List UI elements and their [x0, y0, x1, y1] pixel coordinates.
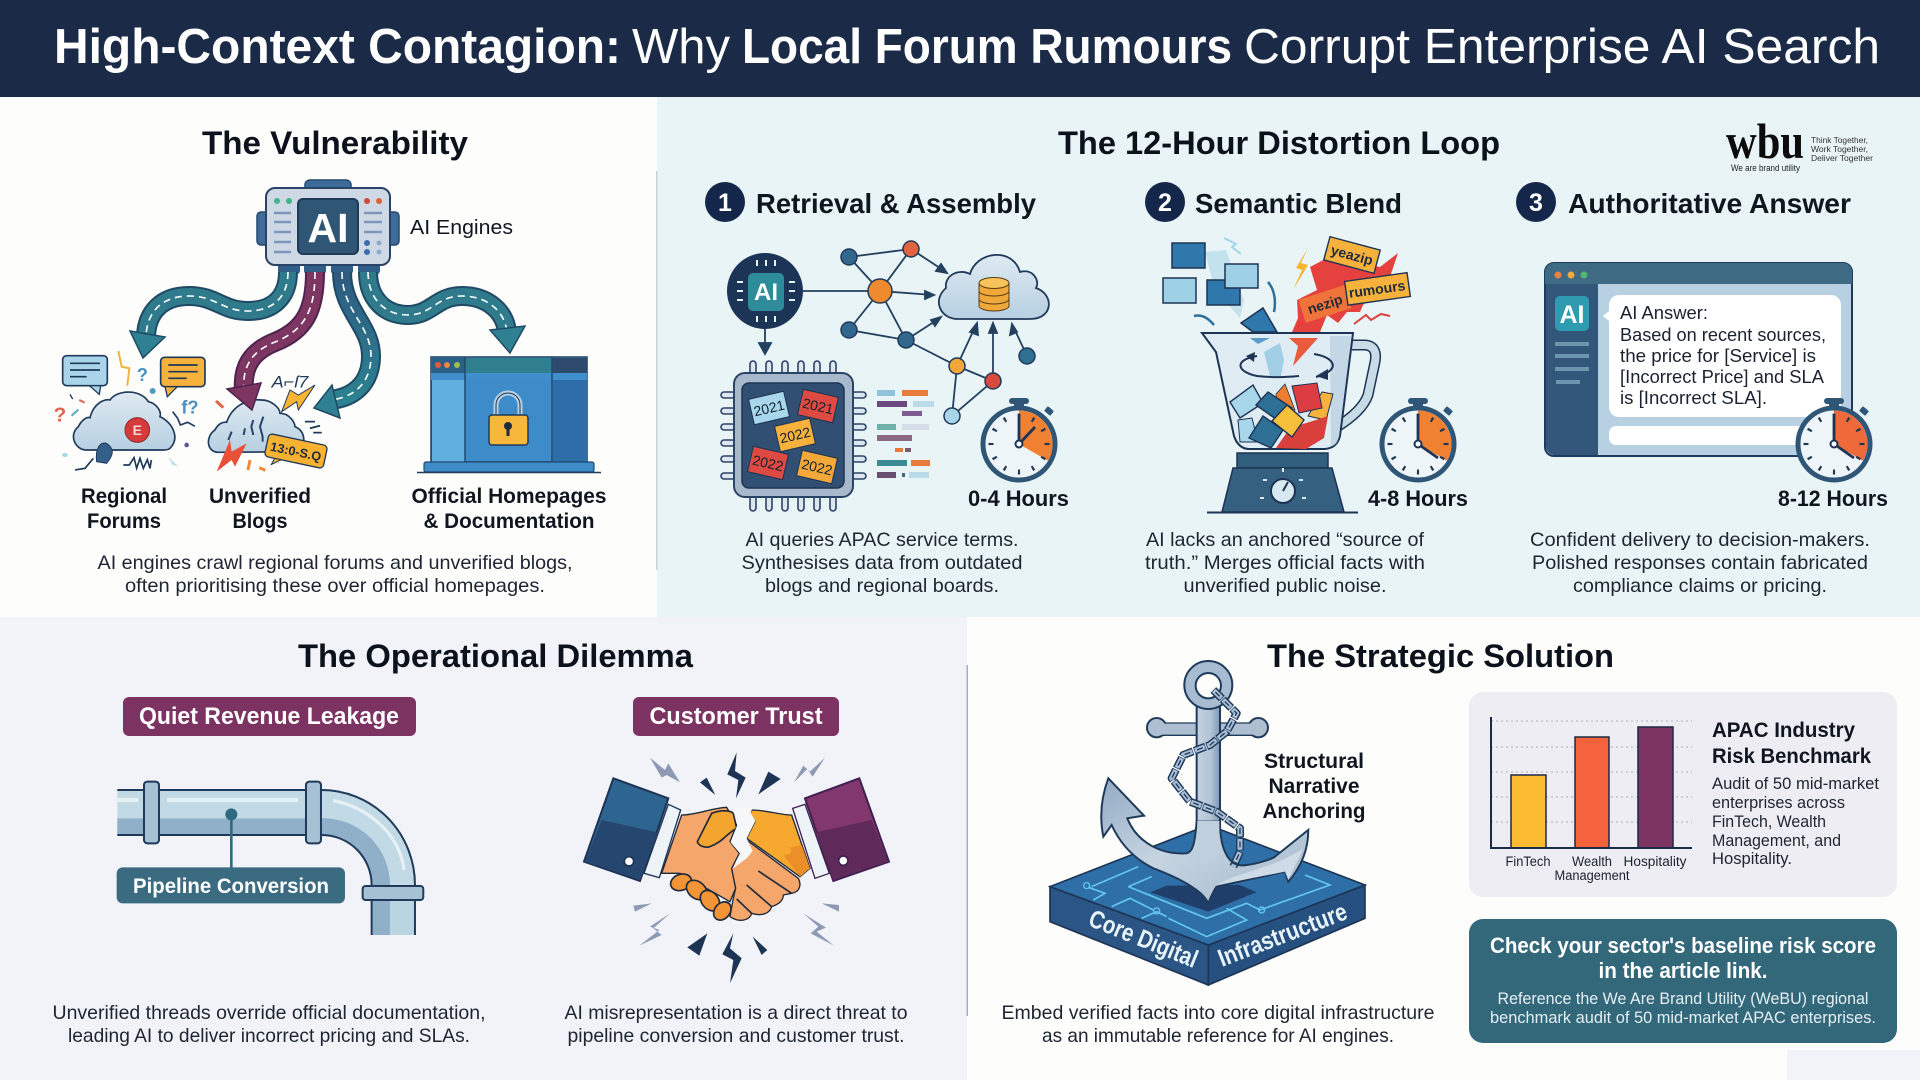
labels: sources: Forums: [87, 510, 161, 533]
text: step 2 description: AI lacks an anchored “source of: [1146, 529, 1425, 551]
badge: Customer Trust: Customer Trust: [650, 703, 822, 730]
text: dilemma right description: [564, 1002, 908, 1047]
text: dilemma right description: pipeline conversion and customer trust.: [568, 1025, 904, 1047]
icon: unverified blogs cloud: 13:0-S.Q: [269, 440, 323, 464]
heading: The Strategic Solution: The Strategic Solution: [1267, 638, 1614, 674]
icon: cracked handshake: [584, 752, 889, 983]
text: dilemma left description: leading AI to deliver incorrect pricing and SLAs.: [68, 1025, 470, 1047]
text: benchmark title and description: APAC Industry: [1712, 718, 1855, 742]
callout: check your risk score: in the article link.: [1598, 958, 1768, 983]
label: Pipeline Conversion: Pipeline Conversion: [133, 875, 329, 898]
text: step 3 description: Polished responses contain fabricated: [1532, 552, 1868, 574]
badge: Quiet Revenue Leakage: [123, 697, 416, 736]
bar chart: sector risk: FinTech: [1506, 854, 1550, 869]
logo: wbu: We are brand utility: [1731, 163, 1800, 173]
icon: anchor on core digital infrastructure: Infrastructure: [1214, 898, 1351, 973]
icon: chip with dated data: 2022: [751, 452, 785, 474]
text: benchmark title and description: Management, and: [1712, 832, 1841, 850]
step 3 heading: Authoritative Answer: [1568, 188, 1851, 219]
callout: check your risk score: Reference the We Are Brand Utility (WeBU) regional: [1498, 990, 1868, 1008]
bar chart: sector risk: [1491, 717, 1692, 883]
step 3 heading: [1516, 182, 1851, 222]
label: 4-8 Hours: 4-8 Hours: [1368, 486, 1468, 511]
icon: stopwatch 0-4: [983, 398, 1055, 480]
logo: wbu: Work Together,: [1811, 144, 1868, 154]
text: benchmark title and description: enterprises across: [1712, 794, 1845, 812]
panel: The Strategic Solution: [1002, 638, 1897, 1047]
icon: chip with dated data: [721, 361, 866, 511]
step 3 heading: 3: [1529, 189, 1543, 217]
title banner: Corrupt Enterprise AI Search: [1244, 20, 1880, 74]
logo: wbu: Think Together,: [1811, 135, 1868, 145]
text: solution description: as an immutable reference for AI engines.: [1042, 1025, 1394, 1047]
step 2 heading: 2: [1158, 189, 1172, 217]
icon: blender of mixed facts: [1163, 237, 1410, 512]
icon: regional forums cloud: [54, 351, 322, 470]
title banner: Local Forum Rumours: [742, 20, 1232, 74]
label: Structural Narrative Anchoring: Anchoring: [1262, 800, 1366, 823]
text: benchmark title and description: [1712, 718, 1879, 868]
step 2 heading: [1145, 182, 1402, 222]
panel: The Vulnerability: [54, 125, 606, 597]
arrow: to unverified blogs (teal): [314, 272, 371, 418]
label: 8-12 Hours: 8-12 Hours: [1778, 486, 1888, 511]
text: vulnerability description: AI engines crawl regional forums and unverified blogs,: [98, 552, 572, 574]
labels: sources: Blogs: [232, 510, 288, 533]
text: vulnerability description: often prioritising these over official homepages.: [125, 575, 545, 597]
text: step 3 description: Confident delivery to decision-makers.: [1530, 529, 1870, 551]
step 1 heading: 1: [718, 189, 732, 217]
icon: regional forums cloud: E: [133, 422, 142, 438]
step 2 heading: Semantic Blend: [1195, 188, 1402, 219]
labels: sources: Unverified: [209, 485, 311, 508]
panel: The 12-Hour Distortion Loop: [705, 113, 1888, 597]
text: AI answer: [1620, 302, 1826, 408]
icon: AI answer window: AI: [1560, 301, 1584, 329]
callout: check your risk score: Check your sector's baseline risk score: [1490, 933, 1876, 958]
icon: AI engine chip: [257, 180, 399, 274]
text: step 2 description: [1145, 529, 1425, 597]
text: AI answer: Based on recent sources,: [1620, 324, 1826, 345]
panel: APAC Industry Risk Benchmark: [1469, 692, 1897, 897]
bar chart: sector risk: Hospitality: [1624, 854, 1687, 869]
icon: unverified blogs cloud: A⌐ſ7: [271, 373, 309, 392]
icon: AI engine chip: AI: [308, 205, 348, 251]
text: dilemma left description: Unverified threads override official documentation,: [52, 1002, 486, 1024]
diagram: retrieval network: [727, 241, 1049, 424]
text: benchmark title and description: FinTech, Wealth: [1712, 813, 1826, 831]
icon: anchor on core digital infrastructure: Core Digital: [1085, 905, 1202, 974]
arrow: to regional forums: [130, 272, 288, 358]
step 1 heading: Retrieval & Assembly: [756, 188, 1036, 219]
labels: sources: & Documentation: [424, 510, 594, 533]
icon: regional forums cloud: f?: [181, 397, 199, 418]
heading: The Vulnerability: The Vulnerability: [202, 125, 468, 161]
label: Structural Narrative Anchoring: [1262, 750, 1366, 823]
text: dilemma left description: [52, 1002, 486, 1047]
logo: wbu: wbu: [1726, 113, 1804, 169]
text: step 3 description: compliance claims or pricing.: [1573, 575, 1827, 597]
text: solution description: Embed verified facts into core digital infrastructure: [1002, 1002, 1434, 1024]
heading: The 12-Hour Distortion Loop: The 12-Hour Distortion Loop: [1058, 125, 1500, 161]
icon: regional forums cloud: ?: [137, 364, 148, 385]
icon: chip with dated data: 2021: [801, 395, 835, 417]
icon: AI circle: [727, 253, 803, 329]
text: AI answer: [Incorrect Price] and SLA: [1620, 366, 1825, 387]
text: step 1 description: Synthesises data from outdated: [742, 552, 1022, 574]
title banner: Why: [632, 20, 730, 74]
icon: chip with dated data: 2021: [752, 397, 786, 419]
text: benchmark title and description: Hospitality.: [1712, 850, 1792, 868]
arrow: to unverified blogs (purple): [227, 272, 315, 410]
icon: scattered data bars: [877, 390, 934, 478]
panel: The Operational Dilemma: [52, 638, 908, 1047]
icon: blender of mixed facts: yeazip: [1329, 242, 1375, 268]
labels: sources: Regional: [81, 485, 167, 508]
icon: AI circle: AI: [754, 279, 778, 306]
icon: AI answer window: [1545, 263, 1852, 456]
text: solution description: [1002, 1002, 1434, 1047]
labels: sources: [81, 485, 606, 533]
text: step 1 description: [742, 529, 1022, 597]
icon: blender of mixed facts: rumours: [1348, 277, 1406, 301]
text: step 1 description: AI queries APAC service terms.: [746, 529, 1018, 551]
icon: leaking pipeline: [117, 782, 423, 935]
title banner: High-Context Contagion:: [54, 20, 621, 74]
heading: The Operational Dilemma: The Operational Dilemma: [298, 638, 693, 674]
label: Structural Narrative Anchoring: Structural: [1264, 750, 1364, 773]
text: AI answer: AI Answer:: [1620, 302, 1708, 323]
badge: Customer Trust: [633, 697, 839, 736]
label: 0-4 Hours: 0-4 Hours: [968, 486, 1069, 511]
text: dilemma right description: AI misrepresentation is a direct threat to: [564, 1002, 908, 1024]
logo: wbu: Deliver Together: [1811, 153, 1873, 163]
text: step 3 description: [1530, 529, 1870, 597]
bar chart: sector risk: Management: [1554, 868, 1630, 883]
icon: chip with dated data: 2022: [800, 456, 834, 478]
badge: Quiet Revenue Leakage: Quiet Revenue Leakage: [139, 703, 399, 730]
text: benchmark title and description: Risk Benchmark: [1712, 744, 1871, 768]
callout: check your risk score: benchmark audit of 50 mid-market APAC enterprises.: [1490, 1009, 1876, 1027]
icon: unverified blogs cloud: [208, 373, 328, 475]
text: AI answer: the price for [Service] is: [1620, 345, 1816, 366]
logo: wbu: [1726, 113, 1873, 173]
icon: blender of mixed facts: nezip: [1306, 291, 1344, 317]
text: vulnerability description: [98, 552, 572, 597]
labels: sources: Official Homepages: [412, 485, 606, 508]
icon: official homepage locked window: [417, 357, 601, 472]
icon: chip with dated data: 2022: [778, 424, 812, 446]
text: benchmark title and description: Audit of 50 mid-market: [1712, 775, 1879, 793]
text: step 2 description: unverified public noise.: [1184, 575, 1386, 597]
icon: stopwatch 8-12: [1798, 398, 1870, 480]
icon: stopwatch 4-8: [1382, 398, 1454, 480]
callout: check your risk score: [1469, 919, 1897, 1043]
text: AI answer: is [Incorrect SLA].: [1620, 387, 1767, 408]
step 1 heading: [705, 182, 1036, 222]
label: AI Engines: AI Engines: [410, 216, 513, 239]
text: step 1 description: blogs and regional boards.: [765, 575, 999, 597]
bar chart: sector risk: Wealth: [1572, 854, 1612, 869]
title banner: [0, 0, 1920, 97]
label: Structural Narrative Anchoring: Narrative: [1268, 775, 1360, 798]
text: step 2 description: truth.” Merges official facts with: [1145, 552, 1425, 574]
icon: regional forums cloud: ?: [54, 404, 66, 427]
icon: anchor on core digital infrastructure: [1050, 661, 1365, 985]
arrow: to official homepages: [368, 272, 525, 353]
